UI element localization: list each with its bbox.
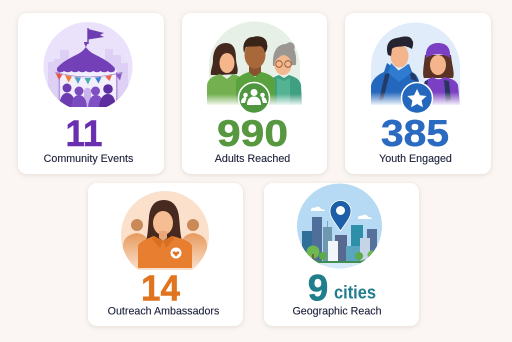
number: 9 cities: 9 — [308, 268, 328, 308]
number: 9 cities — [308, 268, 376, 308]
number: 385: 385 — [381, 112, 449, 154]
panel: geographic reach — [264, 183, 419, 326]
icon: three adults — [205, 22, 305, 114]
panel: youth engaged — [345, 13, 491, 174]
number: 11: 11 — [66, 112, 102, 154]
number: 990: 990 — [217, 112, 288, 154]
icon: festival tent — [44, 22, 132, 112]
number: 9 cities: cities — [334, 282, 376, 302]
panel: outreach ambassadors — [88, 183, 243, 326]
label: adults reached: Adults Reached — [215, 153, 290, 165]
number: 14: 14 — [141, 268, 180, 308]
icon: city with location pin — [297, 184, 382, 268]
icon: ambassador with team — [121, 191, 209, 270]
icon: two youths — [368, 22, 464, 114]
panel: community events — [18, 13, 164, 174]
label: community events: Community Events — [44, 153, 133, 165]
label: geographic reach: Geographic Reach — [292, 306, 382, 318]
label: youth engaged: Youth Engaged — [379, 153, 452, 165]
panel: adults reached — [182, 13, 327, 174]
label: outreach ambassadors: Outreach Ambassadors — [108, 306, 219, 318]
